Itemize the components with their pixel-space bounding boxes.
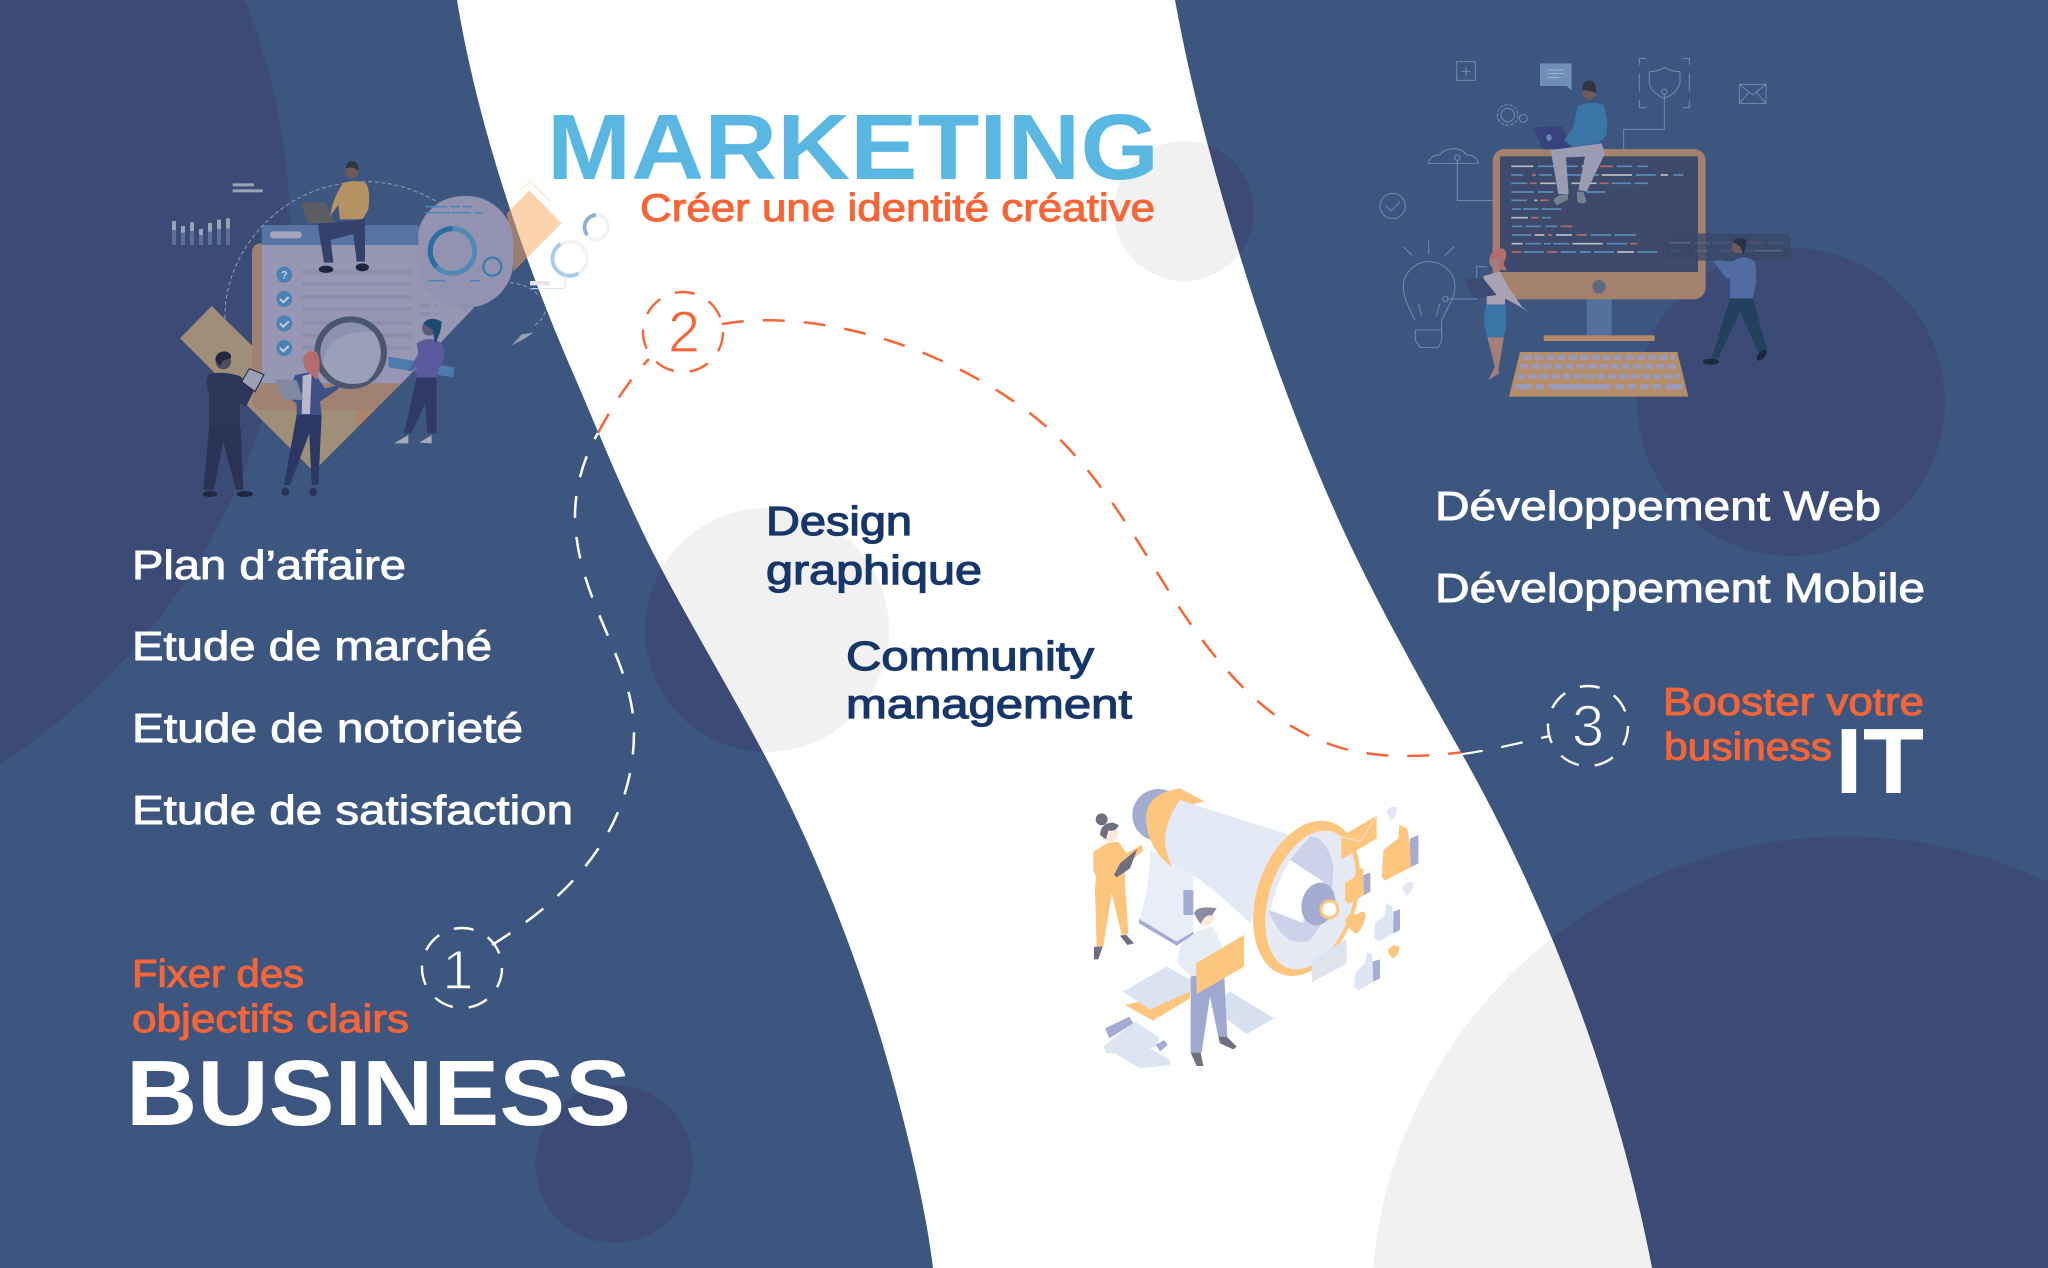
person: seated developer <box>1533 81 1607 206</box>
list: marketing community: management <box>846 681 1133 727</box>
light circles on band <box>662 141 1652 1268</box>
megaphone body <box>1132 788 1379 990</box>
list: IT: Développement Web <box>1435 483 1881 529</box>
list: business <box>132 542 573 833</box>
white central band <box>457 0 1652 1268</box>
illustration: megaphone <box>1093 788 1418 1068</box>
keyboard <box>1509 352 1688 397</box>
list: business: Etude de notorieté <box>132 705 523 751</box>
person: man on top <box>301 161 369 273</box>
code lines <box>1511 166 1783 252</box>
tagline: IT <box>1663 681 1924 769</box>
person: woman with laptop <box>1464 248 1529 380</box>
mail stack <box>1123 967 1274 1034</box>
monitor <box>1493 149 1706 341</box>
checklist <box>276 267 470 362</box>
person: woman with laptop <box>275 351 345 496</box>
tagline: IT: business <box>1664 726 1832 769</box>
step 1 marker <box>422 928 502 1008</box>
orange diamond <box>507 191 562 272</box>
list: marketing design <box>766 498 982 593</box>
floating code panel <box>1665 233 1791 261</box>
person: man with tablet <box>203 351 264 497</box>
donut charts <box>425 207 501 281</box>
circles on band <box>552 215 608 276</box>
heading: BUSINESS: BUSINESS <box>126 1041 631 1145</box>
person: standing man <box>1703 238 1769 365</box>
tagline: business: objectifs clairs <box>132 998 409 1041</box>
chat bubble <box>1540 63 1572 91</box>
step 2 marker: 2 <box>668 300 700 365</box>
icons: likes and mails <box>1312 807 1418 991</box>
tagline: business <box>132 953 409 1041</box>
person: man with envelope <box>1177 907 1244 1066</box>
list: business: Etude de marché <box>132 623 492 669</box>
illustration: business team <box>172 161 608 497</box>
magnifier <box>317 319 454 386</box>
step 3 marker <box>1548 686 1628 766</box>
person: woman with ponytail <box>394 319 444 443</box>
subtitle: Créer une identité créative <box>640 187 1155 230</box>
step 2 marker <box>643 292 723 372</box>
pointing hands <box>1103 1017 1170 1068</box>
thin line icons <box>1380 58 1766 347</box>
tagline: business: Fixer des <box>132 953 304 996</box>
person: woman with tablet <box>1093 813 1143 959</box>
dashed orbit <box>225 182 545 326</box>
list: IT <box>1435 483 1925 611</box>
list: IT: Développement Mobile <box>1435 565 1925 611</box>
mini bars <box>172 183 263 245</box>
illustration: developers <box>1380 58 1791 397</box>
tagline: IT: Booster votre <box>1663 681 1924 724</box>
list: marketing community <box>846 633 1133 727</box>
megaphone stand <box>1139 850 1193 946</box>
step 3 marker: 3 <box>1572 694 1604 759</box>
checklist: ? <box>281 270 288 282</box>
dashed path: IT segment <box>1420 736 1550 758</box>
dashed path: business segment <box>492 433 634 945</box>
heading: IT: IT <box>1835 709 1924 813</box>
list: marketing design: Design <box>766 498 912 544</box>
list: business: Plan d’affaire <box>132 542 406 588</box>
window panel <box>262 245 473 383</box>
list: marketing design: graphique <box>766 547 982 593</box>
list: marketing community: Community <box>846 633 1095 679</box>
step 1 marker: 1 <box>442 938 474 1001</box>
title: MARKETING: MARKETING <box>547 95 1159 199</box>
dashed orange route <box>598 320 1550 756</box>
list: business: Etude de satisfaction <box>132 787 573 833</box>
